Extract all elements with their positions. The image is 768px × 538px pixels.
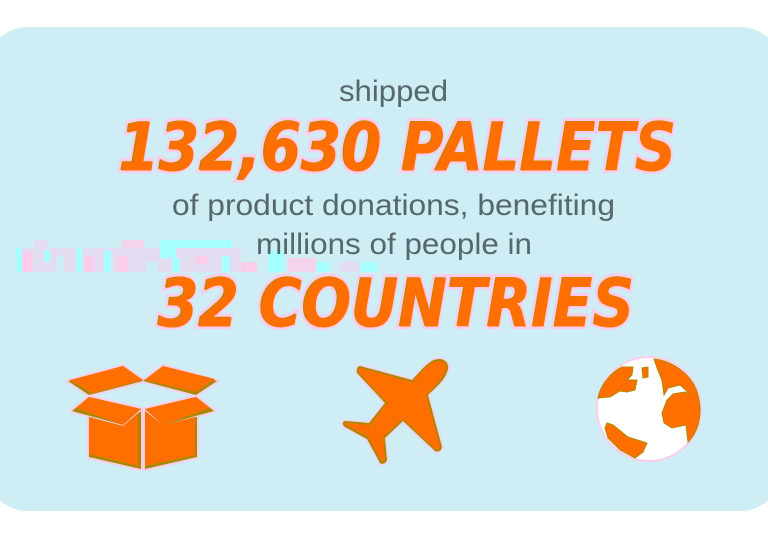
text: shipped: shipped <box>339 75 448 108</box>
heading: 132,630 pallets: 132,630 PALLETS <box>118 108 676 186</box>
text: millions of people in: millions of people in <box>256 228 532 261</box>
south america <box>605 423 647 458</box>
text: of product donations, benefiting: of product donations, benefiting <box>172 189 615 222</box>
north america <box>598 367 637 398</box>
heading: 132,630 pallets: 132,630 PALLETS <box>118 108 676 186</box>
icon: open box <box>68 366 217 469</box>
heading: 32 countries: 32 COUNTRIES <box>157 264 634 342</box>
glitched ghost text strip <box>16 240 378 272</box>
heading: 32 countries: 32 COUNTRIES <box>157 264 634 342</box>
europe and africa <box>654 359 700 442</box>
icon: globe <box>596 356 702 462</box>
heading: 32 countries: 32 COUNTRIES <box>158 264 634 342</box>
greenland <box>642 367 648 378</box>
heading: 132,630 pallets: 132,630 PALLETS <box>120 108 676 186</box>
icon: airplane <box>343 359 448 464</box>
